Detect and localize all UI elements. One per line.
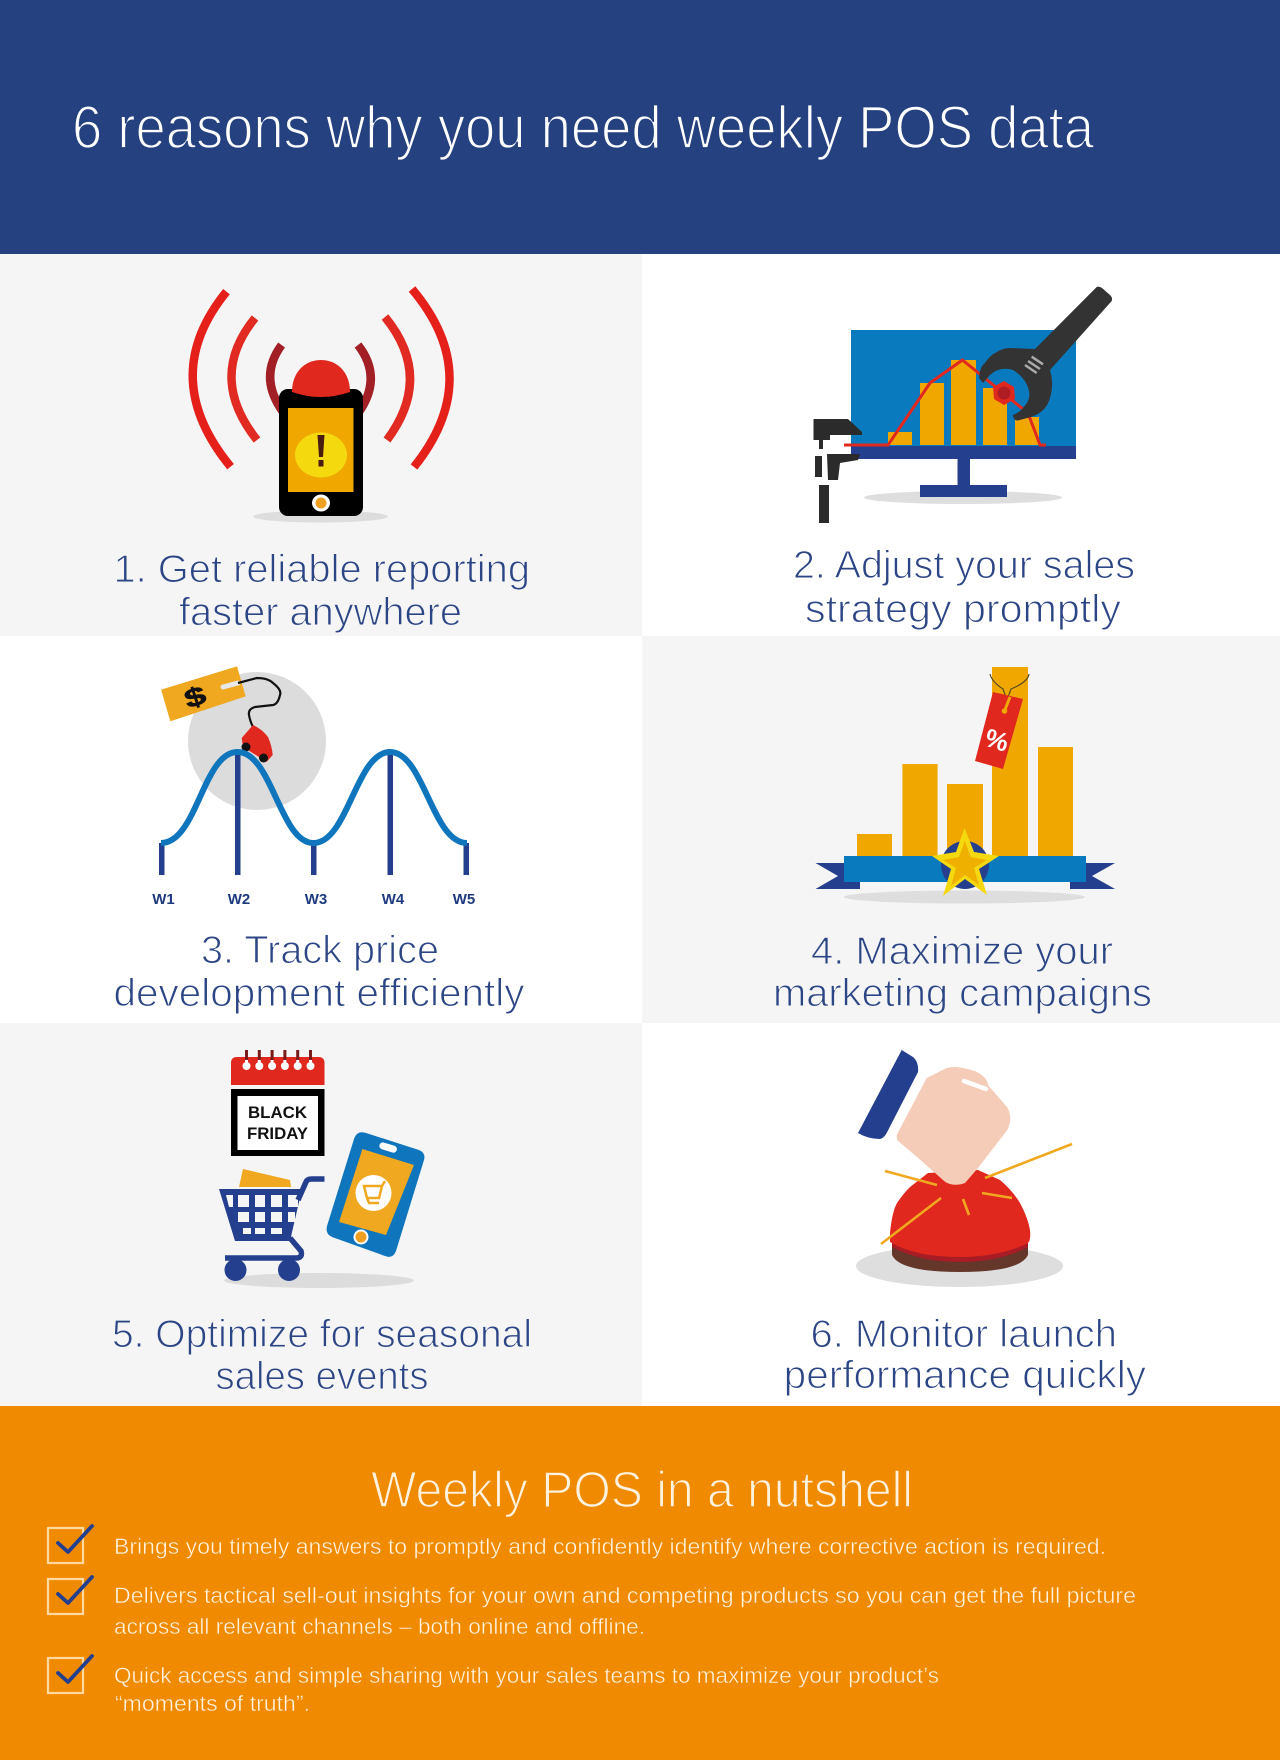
heading: reason 6: 6. Monitor launch bbox=[810, 1313, 1117, 1356]
icon: shopping phone bbox=[327, 1132, 424, 1257]
text: bullet 3: Quick access and simple sharing with your sales teams to maximize your product’s bbox=[114, 1663, 939, 1688]
heading: reason 3 bbox=[114, 929, 525, 1015]
icon: calendar black friday bbox=[231, 1050, 324, 1156]
heading: reason 6: performance quickly bbox=[784, 1354, 1147, 1397]
text: bullet 3 bbox=[114, 1663, 939, 1716]
title: 6 reasons why you need weekly POS data bbox=[72, 94, 1095, 161]
panel: reason 1 reporting bbox=[0, 254, 642, 636]
icon: bar chart with ribbon bbox=[816, 667, 1115, 904]
label: black friday bbox=[247, 1103, 309, 1143]
panel: reason 4 campaigns bbox=[642, 636, 1280, 1023]
panel: reason 5 seasonal bbox=[0, 1023, 642, 1407]
label: black friday: BLACK bbox=[248, 1103, 308, 1122]
label: W1: W1 bbox=[152, 891, 175, 908]
heading: reason 3: development efficiently bbox=[114, 972, 525, 1015]
heading: reason 5: 5. Optimize for seasonal bbox=[112, 1313, 532, 1356]
text: bullet 2: Delivers tactical sell-out insights for your own and competing products so you can get the full picture bbox=[114, 1583, 1136, 1608]
heading: reason 2 bbox=[793, 544, 1135, 631]
heading: reason 1: 1. Get reliable reporting bbox=[114, 548, 530, 591]
panel: reason 3 price bbox=[0, 636, 642, 1023]
label: W2: W2 bbox=[228, 891, 250, 908]
text: bullet 2: across all relevant channels – both online and offline. bbox=[114, 1614, 645, 1639]
heading: reason 2: 2. Adjust your sales bbox=[793, 544, 1135, 587]
icon: hand pressing button bbox=[856, 1050, 1072, 1287]
icon: checkbox 1 bbox=[48, 1526, 92, 1563]
icon: monitor with wrench bbox=[814, 287, 1112, 523]
text: bullet 1: Brings you timely answers to promptly and confidently identify where corrective action is required. bbox=[114, 1534, 1106, 1559]
heading: reason 6 bbox=[784, 1313, 1147, 1397]
heading: reason 4 bbox=[773, 930, 1152, 1015]
text: bullet 2 bbox=[114, 1583, 1136, 1639]
icon: alarm phone bbox=[193, 289, 450, 522]
icon: checkbox 2 bbox=[48, 1577, 92, 1614]
heading: reason 5 bbox=[112, 1313, 532, 1398]
heading: reason 4: 4. Maximize your bbox=[811, 930, 1113, 973]
heading: reason 5: sales events bbox=[216, 1355, 428, 1398]
heading: reason 4: marketing campaigns bbox=[773, 972, 1152, 1015]
label: W3: W3 bbox=[305, 891, 327, 908]
heading: nutshell: Weekly POS in a nutshell bbox=[371, 1461, 913, 1518]
text: bullet 3: “moments of truth”. bbox=[115, 1691, 310, 1716]
label: W5: W5 bbox=[453, 891, 475, 908]
panel: nutshell summary bbox=[0, 1406, 1280, 1760]
icon: shopping cart bbox=[219, 1169, 414, 1288]
icon: price curve chart bbox=[152, 667, 475, 908]
label: dollar sign: $ bbox=[181, 680, 209, 714]
heading: reason 1 bbox=[114, 548, 530, 634]
heading: reason 3: 3. Track price bbox=[201, 929, 439, 972]
label: percent: % bbox=[982, 722, 1012, 758]
panel: reason 6 launch bbox=[642, 1023, 1280, 1407]
panel: reason 2 strategy bbox=[642, 254, 1280, 636]
heading: reason 2: strategy promptly bbox=[805, 588, 1122, 631]
header band bbox=[0, 0, 1280, 254]
label: W4: W4 bbox=[382, 891, 405, 908]
heading: reason 1: faster anywhere bbox=[179, 591, 462, 634]
icon: checkbox 3 bbox=[48, 1656, 92, 1693]
label: black friday: FRIDAY bbox=[247, 1124, 309, 1143]
